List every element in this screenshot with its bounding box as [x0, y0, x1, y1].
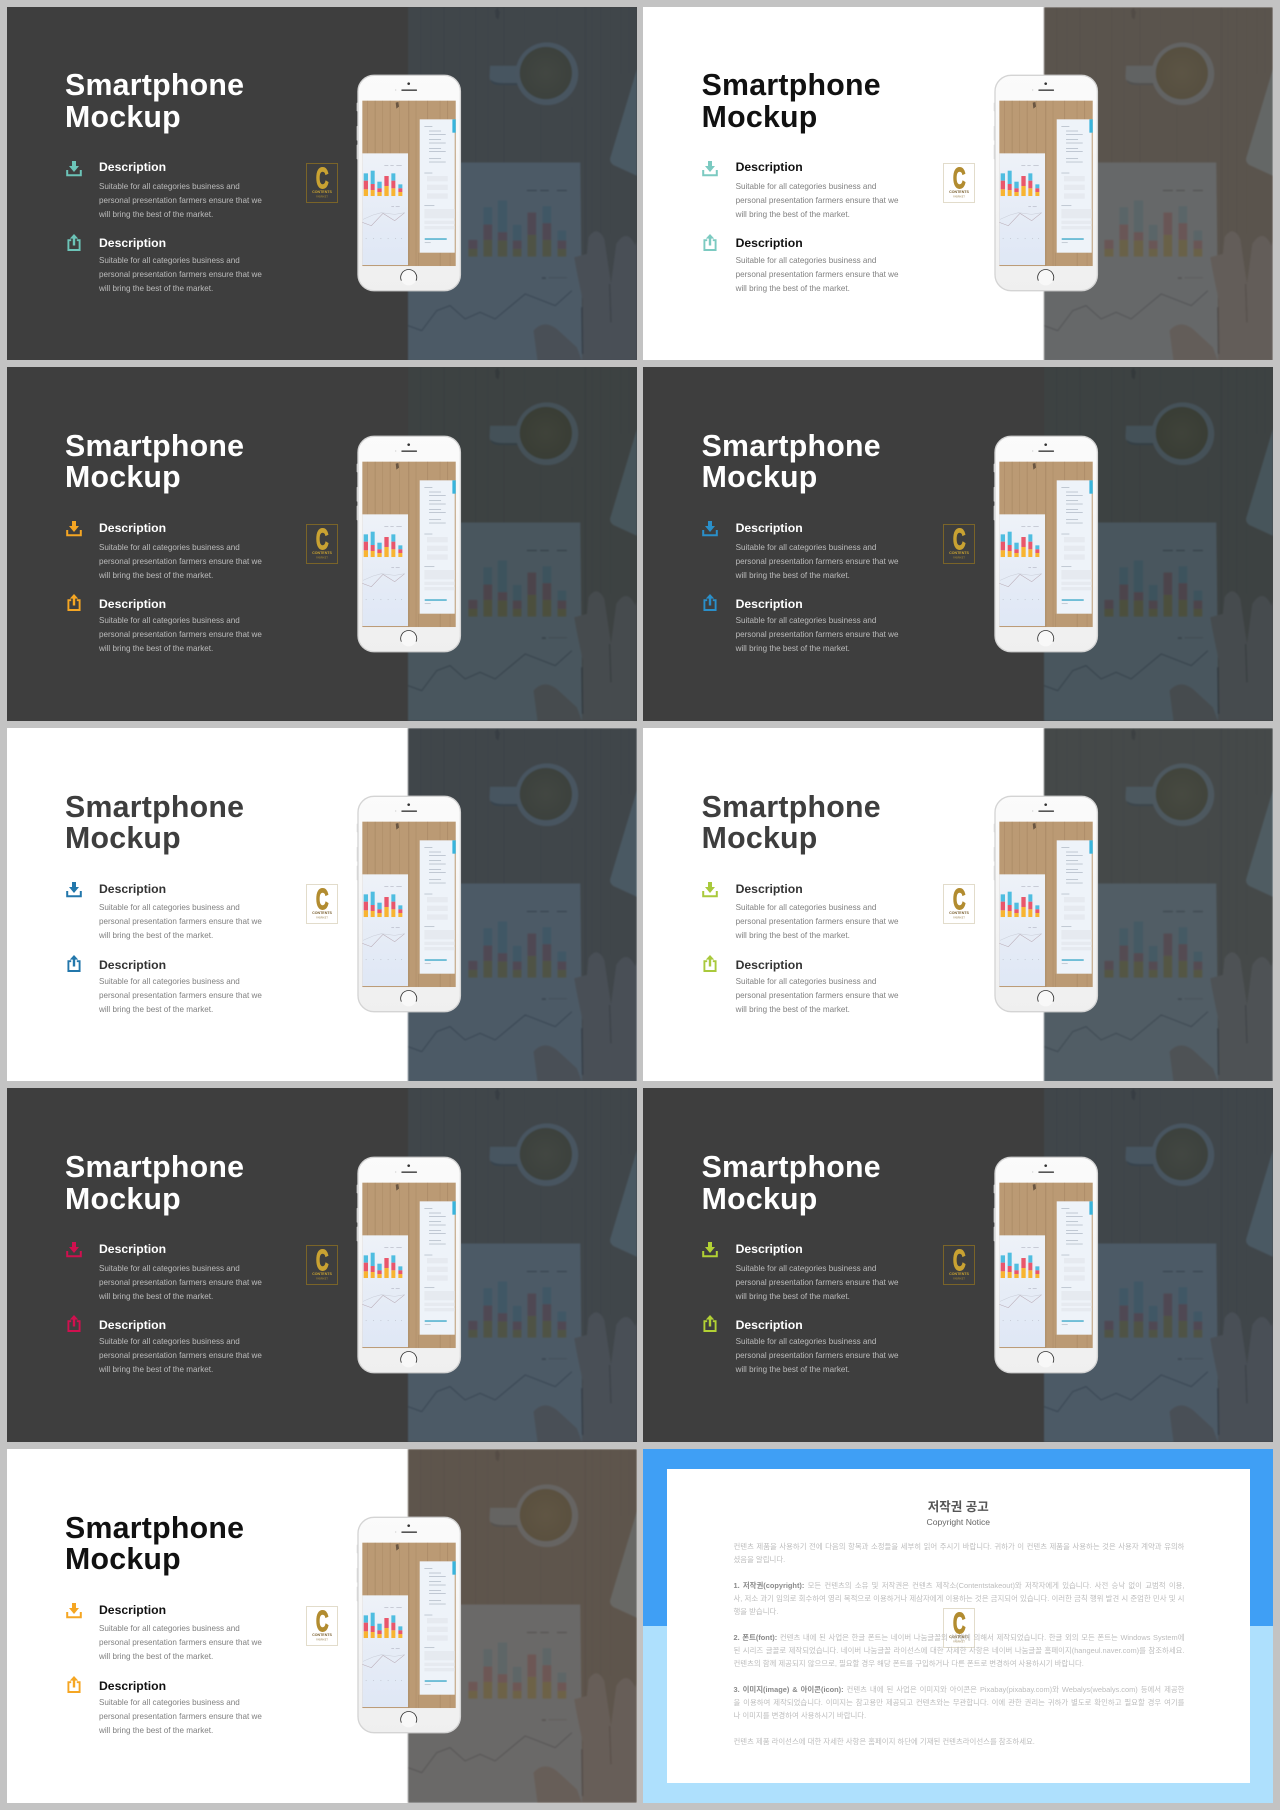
heading: Description	[99, 160, 166, 174]
body text: Suitable for all categories business and	[99, 182, 240, 191]
title: Smartphone	[65, 791, 244, 824]
title	[702, 1152, 932, 1216]
logo: FABRIKET	[953, 1277, 965, 1280]
body text: will bring the best of the market.	[99, 644, 213, 653]
logo: CONTENTS	[949, 190, 969, 194]
logo: CONTENTS	[949, 911, 969, 915]
notice body text: 셨음을 알립니다.	[733, 1555, 785, 1564]
title: Mockup	[65, 822, 181, 855]
title: Mockup	[702, 1183, 818, 1216]
photo background	[408, 370, 637, 721]
description item 1	[702, 160, 898, 219]
logo: C	[316, 884, 329, 916]
description item 2	[67, 594, 262, 653]
notice title: 저작권 공고	[928, 1500, 989, 1514]
title: Mockup	[65, 1543, 181, 1576]
icon: upload	[703, 594, 717, 611]
heading: Description	[736, 597, 803, 611]
logo: FABRIKET	[953, 556, 965, 559]
title: Mockup	[65, 101, 181, 134]
logo: FABRIKET	[316, 556, 329, 559]
title: Smartphone	[65, 1512, 244, 1545]
photo background	[408, 1449, 637, 1803]
notice body text: 을 이용하여 제작되었습니다. 이미지는 참고용만 제공되고 컨텐츠와는 무관합니다. 이에 관한 권리는 귀하가 별도로 확인하고 필요할 경우 여기를	[733, 1698, 1184, 1707]
body text	[99, 1696, 274, 1738]
heading: Description	[736, 958, 803, 972]
logo: FABRIKET	[316, 917, 329, 920]
body text: personal presentation farmers ensure that we	[736, 1278, 898, 1287]
body text: Suitable for all categories business and	[99, 977, 240, 986]
body text	[99, 1622, 274, 1664]
body text: will bring the best of the market.	[736, 284, 850, 293]
title	[65, 1513, 295, 1577]
body text: Suitable for all categories business and	[736, 1337, 876, 1346]
body text: personal presentation farmers ensure that we	[99, 1638, 262, 1647]
body text: Suitable for all categories business and	[736, 182, 876, 191]
notice body text: 컨텐츠 제품을 사용하기 전에 다음의 항목과 소정들을 세부히 읽어 주시기 바랍니다. 귀하가 이 컨텐츠 제품을 사용하는 것은 사용자 계약과 유의하	[733, 1542, 1184, 1551]
notice body text: 컨텐츠 제품 라이선스에 대한 자세한 사항은 홈페이지 하단에 기재된 컨텐츠라이선스를 참조하세요.	[733, 1737, 1035, 1746]
photo background	[408, 1088, 637, 1442]
logo: CONTENTS	[949, 1634, 970, 1638]
photo background	[1044, 370, 1273, 721]
description item 1	[66, 160, 262, 219]
logo: FABRIKET	[953, 196, 965, 199]
photo background	[408, 8, 637, 360]
body text: personal presentation farmers ensure that we	[99, 557, 262, 566]
white notice card	[667, 1469, 1250, 1783]
phone mockup	[353, 1152, 466, 1378]
description item 2	[702, 1310, 917, 1372]
title: Smartphone	[65, 1151, 244, 1184]
icon: upload	[66, 955, 82, 972]
photo background	[408, 728, 637, 1082]
title	[702, 69, 881, 134]
description item 1	[702, 521, 898, 580]
title	[65, 430, 244, 494]
body text: personal presentation farmers ensure that we	[99, 630, 262, 639]
body text: will bring the best of the market.	[736, 1005, 850, 1014]
body text: personal presentation farmers ensure that we	[99, 1351, 262, 1360]
body text: will bring the best of the market.	[736, 1292, 850, 1301]
body text: will bring the best of the market.	[736, 571, 850, 580]
body text: Suitable for all categories business and	[736, 977, 876, 986]
logo	[306, 1245, 338, 1285]
heading: Description	[99, 597, 166, 611]
logo: CONTENTS	[312, 551, 333, 555]
phone mockup	[356, 436, 462, 652]
logo: C	[316, 1245, 329, 1277]
description item 2	[66, 1671, 281, 1733]
icon: download	[66, 881, 82, 898]
body text: personal presentation farmers ensure that we	[99, 991, 262, 1000]
description item 1	[66, 1595, 281, 1657]
phone mockup	[990, 791, 1103, 1018]
panel: slide 1 dark teal	[7, 7, 637, 360]
logo: FABRIKET	[953, 917, 965, 920]
logo: C	[953, 884, 965, 916]
body text: personal presentation farmers ensure that we	[736, 1351, 898, 1360]
title: Mockup	[702, 461, 818, 494]
notice body text: 나 이미지를 변경하여 사용하시기 바랍니다.	[733, 1711, 866, 1720]
icon: download	[702, 881, 718, 898]
body text: will bring the best of the market.	[99, 931, 213, 940]
logo	[943, 884, 975, 924]
notice body text: 된 시리즈 글꼴로 제작되었습니다. 네이버 나눔글꼴 라이선스에 대한 자세한 사항은 네이버 나눔글꼴 홈페이지(hangeul.naver.com)를 참조하세요.	[733, 1646, 1184, 1655]
body text	[99, 182, 262, 219]
title	[65, 69, 244, 134]
body text: personal presentation farmers ensure that we	[736, 991, 898, 1000]
photo background	[1044, 1088, 1273, 1442]
notice body text	[733, 1540, 1184, 1748]
photo background	[1043, 7, 1273, 360]
panel: slide 8 dark lime	[643, 1088, 1273, 1442]
icon: upload	[703, 234, 717, 251]
description item 2	[703, 234, 898, 293]
phone mockup	[990, 1152, 1103, 1378]
heading: Description	[736, 521, 803, 535]
notice body text: 행을 받습니다.	[733, 1607, 778, 1616]
title: Smartphone	[702, 791, 881, 824]
body text: personal presentation farmers ensure that we	[736, 196, 898, 205]
logo: CONTENTS	[949, 551, 969, 555]
logo: FABRIKET	[954, 1640, 966, 1643]
body text	[736, 1335, 911, 1377]
body text	[736, 182, 898, 219]
body text: Suitable for all categories business and	[99, 543, 240, 552]
body text: Suitable for all categories business and	[99, 1264, 240, 1273]
icon: upload	[66, 1676, 82, 1693]
body text	[99, 616, 262, 653]
logo	[943, 1608, 975, 1648]
logo: CONTENTS	[312, 1272, 333, 1276]
panel: slide 2 white teal	[643, 7, 1273, 360]
notice body text: 3. 이미지(image) & 아이콘(icon): 컨텐츠 내에 된 사업은 이미지와 아이콘은 Pixabay(pixabay.com)와 Webalys(webalys.com) 등에서 제공한	[733, 1685, 1184, 1694]
panel: slide 5 white blue	[7, 728, 637, 1081]
icon: upload	[702, 1315, 718, 1332]
phone mockup	[353, 791, 466, 1018]
description item 2	[66, 950, 281, 1012]
logo	[943, 524, 975, 564]
heading: Description	[99, 1242, 166, 1256]
panel: copyright notice	[643, 1449, 1273, 1802]
description item 1	[66, 1234, 281, 1296]
body text	[99, 543, 262, 580]
icon: download	[66, 161, 82, 176]
title: Smartphone	[65, 69, 244, 102]
notice body text: 2. 폰트(font): 컨텐츠 내에 된 사업은 한글 폰트는 네이버 나눔글꼴의 서체에 의해서 제작되었습니다. 한글 외의 모든 폰트는 Windows System에	[733, 1633, 1184, 1642]
title: Mockup	[702, 101, 818, 134]
heading: Description	[736, 160, 803, 174]
panel: slide 4 dark blue	[643, 367, 1273, 721]
notice subtitle: Copyright Notice	[927, 1517, 990, 1527]
phone mockup	[356, 74, 462, 292]
body text: personal presentation farmers ensure that we	[736, 917, 898, 926]
body text: personal presentation farmers ensure that we	[736, 557, 898, 566]
body text: will bring the best of the market.	[99, 210, 213, 219]
description item 2	[702, 950, 917, 1012]
description item 1	[702, 874, 917, 936]
panel: slide 7 dark crimson	[7, 1088, 637, 1442]
logo: C	[953, 163, 965, 195]
description item 1	[66, 874, 281, 936]
body text: will bring the best of the market.	[99, 1005, 213, 1014]
icon: upload	[702, 955, 718, 972]
logo	[943, 1245, 975, 1285]
body text	[99, 1262, 274, 1304]
heading: Description	[99, 1679, 166, 1693]
body text: Suitable for all categories business and	[736, 256, 876, 265]
body text: personal presentation farmers ensure that we	[736, 270, 898, 279]
logo	[306, 884, 338, 924]
phone mockup	[353, 1512, 466, 1739]
heading: Description	[736, 1242, 803, 1256]
icon: download	[66, 521, 82, 536]
body text: personal presentation farmers ensure that we	[99, 1278, 262, 1287]
body text: personal presentation farmers ensure that we	[736, 630, 898, 639]
heading: Description	[99, 1318, 166, 1332]
logo: CONTENTS	[312, 1632, 333, 1636]
body text: Suitable for all categories business and	[99, 1337, 240, 1346]
icon: download	[702, 161, 718, 176]
body text: Suitable for all categories business and	[736, 616, 876, 625]
logo	[306, 1606, 338, 1646]
title: Mockup	[702, 822, 818, 855]
logo	[306, 524, 338, 564]
icon: upload	[67, 234, 81, 251]
body text: personal presentation farmers ensure that we	[99, 1712, 262, 1721]
body text: Suitable for all categories business and	[736, 1264, 876, 1273]
body text	[736, 616, 898, 653]
body text: will bring the best of the market.	[736, 210, 850, 219]
body text	[736, 901, 911, 943]
body text: will bring the best of the market.	[99, 1726, 213, 1735]
body text: Suitable for all categories business and	[736, 543, 876, 552]
heading: Description	[99, 958, 166, 972]
logo	[943, 163, 975, 203]
title	[65, 792, 295, 856]
body text	[99, 975, 274, 1017]
body text: personal presentation farmers ensure that we	[99, 270, 262, 279]
title: Mockup	[65, 1183, 181, 1216]
heading: Description	[736, 1318, 803, 1332]
logo: CONTENTS	[949, 1272, 969, 1276]
logo: FABRIKET	[316, 1638, 329, 1641]
body text: will bring the best of the market.	[99, 1292, 213, 1301]
logo: C	[953, 524, 965, 556]
notice body text: 1. 저작권(copyright): 모든 컨텐츠의 소유 및 저작권은 컨텐츠 제작소(Contentstakeout)와 저작자에게 있습니다. 사전 승낙 없이 교범적 이용,	[733, 1581, 1184, 1590]
title	[702, 430, 881, 494]
body text: will bring the best of the market.	[99, 1365, 213, 1374]
panel: slide 6 white lime	[643, 728, 1273, 1081]
body text: personal presentation farmers ensure that we	[99, 196, 262, 205]
phone mockup	[994, 436, 1098, 652]
body text	[736, 256, 898, 293]
title	[65, 1152, 295, 1216]
body text	[99, 256, 262, 293]
title	[702, 792, 932, 856]
heading: Description	[99, 882, 166, 896]
heading: Description	[736, 882, 803, 896]
icon: download	[66, 1602, 82, 1619]
logo: FABRIKET	[316, 1277, 329, 1280]
body text	[736, 543, 898, 580]
panel: slide 9 white orange	[7, 1449, 637, 1802]
logo: C	[316, 524, 329, 556]
body text	[99, 1335, 274, 1377]
phone mockup	[994, 74, 1098, 292]
body text: personal presentation farmers ensure that we	[99, 917, 262, 926]
body text: Suitable for all categories business and	[736, 903, 876, 912]
body text: Suitable for all categories business and	[99, 256, 240, 265]
body text: will bring the best of the market.	[99, 571, 213, 580]
notice body text: 사, 저소 과기 임의로 회수하여 영리 목적으로 이용하거나 제삼자에게 이용하는 것은 금지되어 있습니다. 이러한 금칙 행위 발견 시 준엄한 민사 및 시	[733, 1594, 1184, 1603]
body text: will bring the best of the market.	[736, 644, 850, 653]
description item 2	[703, 594, 898, 653]
icon: upload	[67, 594, 81, 611]
heading: Description	[99, 236, 166, 250]
logo: FABRIKET	[316, 196, 329, 199]
icon: download	[66, 1241, 82, 1258]
icon: upload	[66, 1315, 82, 1332]
photo background	[1044, 728, 1273, 1082]
description item 2	[66, 1310, 281, 1372]
heading: Description	[736, 236, 803, 250]
body text: will bring the best of the market.	[736, 1365, 850, 1374]
body text: will bring the best of the market.	[99, 284, 213, 293]
body text: will bring the best of the market.	[736, 931, 850, 940]
logo: C	[316, 163, 329, 195]
logo	[306, 163, 338, 203]
logo: C	[953, 1245, 965, 1277]
title: Smartphone	[702, 430, 881, 463]
title: Smartphone	[65, 430, 244, 463]
logo: C	[953, 1608, 966, 1640]
title: Smartphone	[702, 69, 881, 102]
notice body text: 컨텐츠의 함께 제공되지 않으므로, 필요할 경우 해당 폰트를 구입하거나 다른 폰트로 변경하여 사용하시기 바랍니다.	[733, 1659, 1084, 1668]
panel: slide 3 dark orange	[7, 367, 637, 721]
body text	[736, 975, 911, 1017]
logo: C	[316, 1606, 329, 1638]
heading: Description	[99, 1603, 166, 1617]
logo: CONTENTS	[312, 911, 333, 915]
title: Smartphone	[702, 1151, 881, 1184]
title: Mockup	[65, 461, 181, 494]
heading: Description	[99, 521, 166, 535]
description item 2	[67, 234, 262, 293]
body text: Suitable for all categories business and	[99, 616, 240, 625]
icon: download	[702, 1241, 718, 1258]
description item 1	[66, 521, 262, 580]
description item 1	[702, 1234, 917, 1296]
icon: download	[702, 521, 718, 536]
body text: Suitable for all categories business and	[99, 903, 240, 912]
body text	[99, 901, 274, 943]
body text: Suitable for all categories business and	[99, 1624, 240, 1633]
logo: CONTENTS	[312, 190, 333, 194]
body text: will bring the best of the market.	[99, 1652, 213, 1661]
body text	[736, 1262, 911, 1304]
body text: Suitable for all categories business and	[99, 1698, 240, 1707]
